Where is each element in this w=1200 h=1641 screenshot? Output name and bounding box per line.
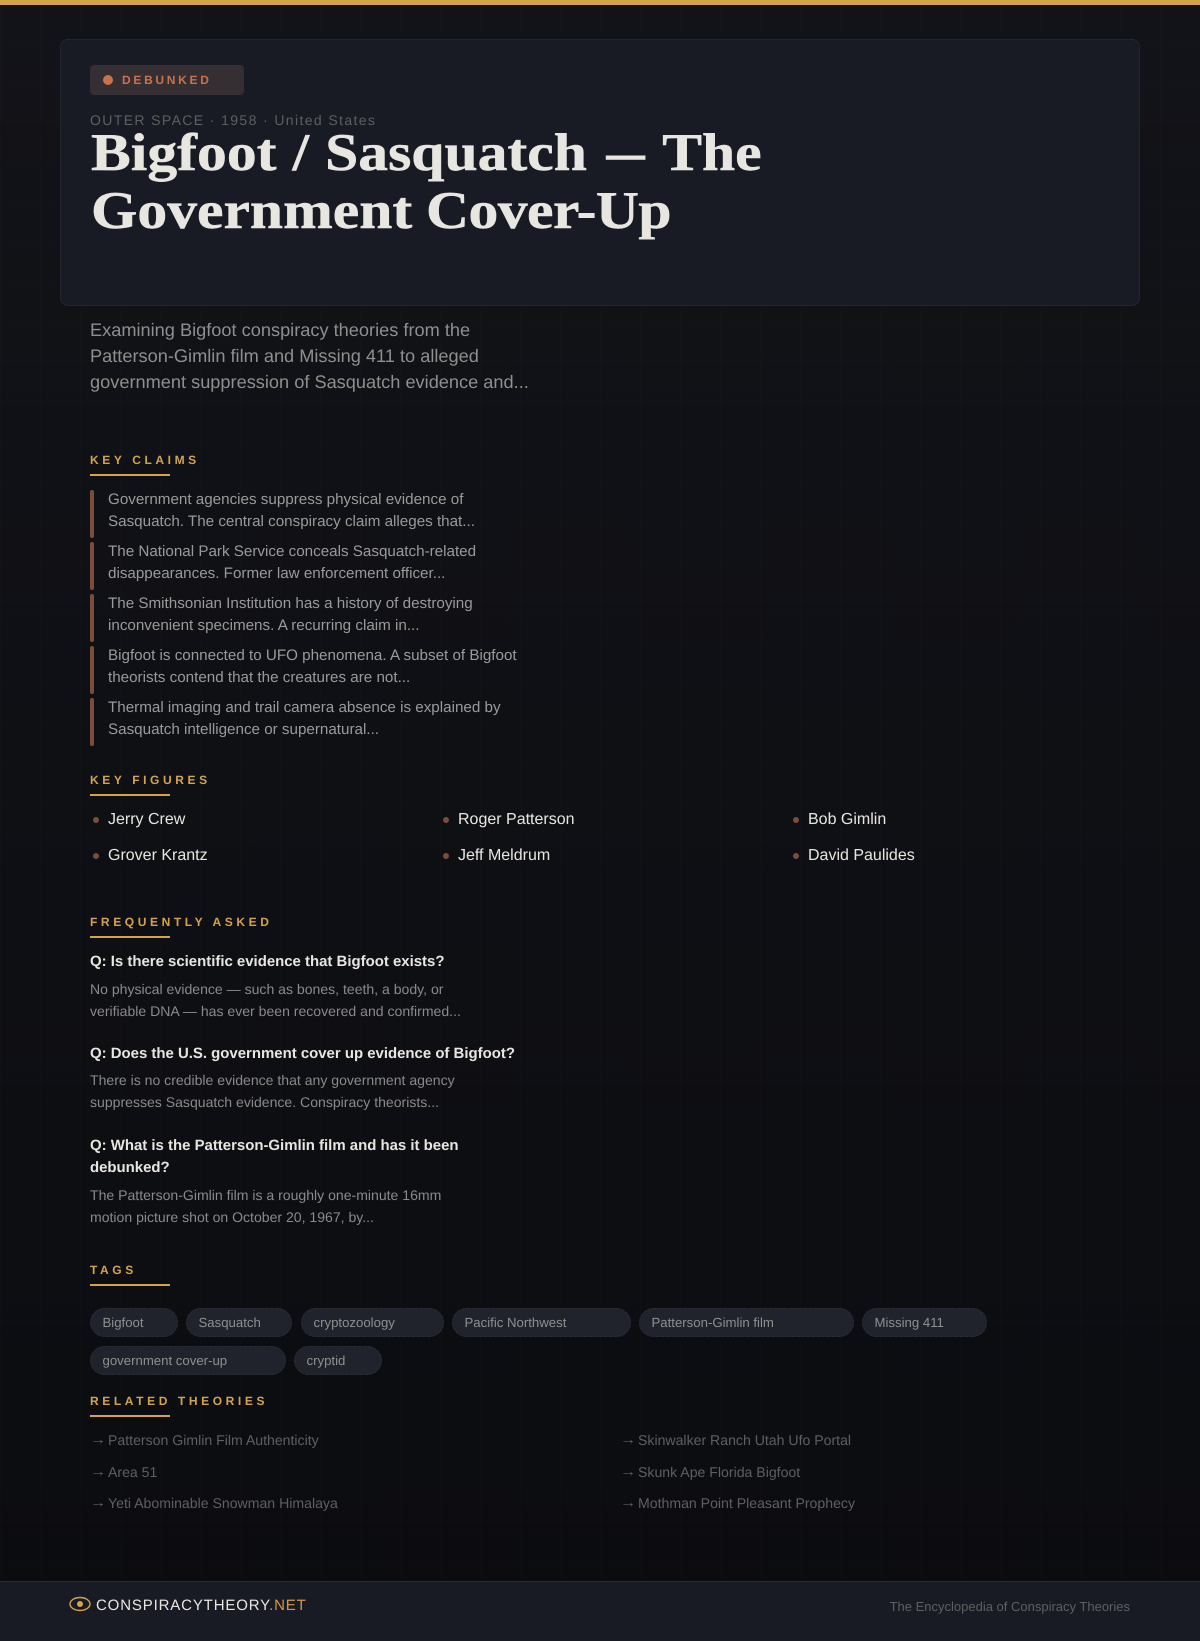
title: Government Cover-Up	[91, 182, 671, 240]
tag: government cover-up	[102, 1353, 227, 1368]
heading: tags: TAGS	[90, 1263, 137, 1277]
link: Area 51	[108, 1464, 157, 1480]
claim 5: Sasquatch intelligence or supernatural...	[108, 721, 379, 738]
link: →	[620, 1431, 636, 1447]
figure: David Paulides: David Paulides	[808, 847, 915, 864]
answer 2: There is no credible evidence that any government agency	[90, 1072, 455, 1088]
footer tagline: The Encyclopedia of Conspiracy Theories	[890, 1599, 1130, 1614]
description: government suppression of Sasquatch evidence and...	[90, 372, 529, 392]
figure: Grover Krantz: Grover Krantz	[108, 847, 208, 864]
answer 2	[90, 1072, 455, 1110]
claim 2: The National Park Service conceals Sasquatch-related	[108, 543, 476, 560]
tag: Pacific Northwest	[464, 1315, 566, 1330]
badge label: DEBUNKED	[122, 73, 212, 87]
figure: Jeff Meldrum: Jeff Meldrum	[458, 847, 550, 864]
link: Skunk Ape Florida Bigfoot	[638, 1464, 800, 1480]
tag	[186, 1308, 292, 1337]
answer 1: No physical evidence — such as bones, teeth, a body, or	[90, 981, 443, 997]
top accent bar	[0, 0, 1200, 5]
answer 3: The Patterson-Gimlin film is a roughly one-minute 16mm	[90, 1187, 441, 1203]
panel: related theories links	[90, 1431, 855, 1511]
tag	[90, 1308, 178, 1337]
question 3	[90, 1137, 458, 1176]
tag: cryptid	[306, 1353, 345, 1368]
badge dot	[103, 75, 113, 85]
tag: Patterson-Gimlin film	[652, 1315, 774, 1330]
panel: key figures list	[93, 811, 915, 864]
claim 4: theorists contend that the creatures are not...	[108, 669, 410, 686]
claim 1: Government agencies suppress physical evidence of	[108, 491, 463, 508]
tag	[639, 1308, 854, 1337]
eyebrow: location and year: OUTER SPACE · 1958 · United States	[90, 112, 376, 128]
tag	[90, 1346, 286, 1375]
tag	[294, 1346, 382, 1375]
answer 2: suppresses Sasquatch evidence. Conspiracy theorists...	[90, 1094, 439, 1110]
figure: Bob Gimlin: Bob Gimlin	[808, 811, 886, 828]
answer 1: verifiable DNA — has ever been recovered and confirmed...	[90, 1003, 461, 1019]
answer 3	[90, 1187, 441, 1225]
description: Patterson-Gimlin film and Missing 411 to alleged	[90, 346, 479, 366]
link: Patterson Gimlin Film Authenticity	[108, 1432, 319, 1448]
link	[90, 1463, 157, 1480]
claim 1: Sasquatch. The central conspiracy claim alleges that...	[108, 513, 475, 530]
heading: frequently asked: FREQUENTLY ASKED	[90, 915, 273, 929]
tag: Sasquatch	[198, 1315, 261, 1330]
tag: Bigfoot	[102, 1315, 144, 1330]
question 1: Q: Is there scientific evidence that Bigfoot exists?	[90, 953, 444, 970]
answer 1	[90, 981, 461, 1019]
tag	[452, 1308, 631, 1337]
question 3: debunked?	[90, 1159, 170, 1176]
link: →	[90, 1431, 106, 1447]
claim 3: The Smithsonian Institution has a history of destroying	[108, 595, 473, 612]
link: →	[620, 1494, 636, 1510]
title: Bigfoot / Sasquatch The	[91, 124, 762, 182]
heading: related theories: RELATED THEORIES	[90, 1394, 268, 1408]
link: →	[90, 1463, 106, 1479]
tag: Missing 411	[874, 1315, 944, 1330]
link: →	[620, 1463, 636, 1479]
title: —	[606, 124, 645, 182]
footer	[0, 1581, 1200, 1641]
badge: debunked	[90, 65, 244, 95]
claim 5	[90, 698, 501, 746]
tag: cryptozoology	[314, 1315, 395, 1330]
panel: key claims list	[90, 490, 517, 746]
claim 2: disappearances. Former law enforcement officer...	[108, 565, 445, 582]
claim 3: inconvenient specimens. A recurring claim in...	[108, 617, 420, 634]
link: Skinwalker Ranch Utah Ufo Portal	[638, 1432, 851, 1448]
claim 3	[90, 594, 473, 642]
claim 4	[90, 646, 517, 694]
answer 3: motion picture shot on October 20, 1967, by...	[90, 1209, 374, 1225]
claim 4: Bigfoot is connected to UFO phenomena. A subset of Bigfoot	[108, 647, 517, 664]
figure: Jerry Crew: Jerry Crew	[108, 811, 185, 828]
heading: key claims: KEY CLAIMS	[90, 453, 200, 467]
tag	[862, 1308, 987, 1337]
question 3: Q: What is the Patterson-Gimlin film and has it been	[90, 1137, 458, 1154]
panel: header card	[60, 39, 1140, 306]
link: Mothman Point Pleasant Prophecy	[638, 1495, 855, 1511]
logo wordmark: CONSPIRACYTHEORY.NET	[96, 1597, 307, 1614]
title	[91, 124, 762, 240]
link: →	[90, 1494, 106, 1510]
description	[90, 320, 529, 392]
question 2: Q: Does the U.S. government cover up evidence of Bigfoot?	[90, 1045, 515, 1062]
tag	[301, 1308, 444, 1337]
icon: eye logo	[69, 1596, 91, 1612]
claim 5: Thermal imaging and trail camera absence is explained by	[108, 699, 501, 716]
figure: Roger Patterson: Roger Patterson	[458, 811, 575, 828]
description: Examining Bigfoot conspiracy theories from the	[90, 320, 470, 340]
link: Yeti Abominable Snowman Himalaya	[108, 1495, 338, 1511]
claim 2	[90, 542, 476, 590]
heading: key figures: KEY FIGURES	[90, 773, 211, 787]
panel: tags	[90, 1308, 987, 1375]
claim 1	[90, 490, 475, 538]
